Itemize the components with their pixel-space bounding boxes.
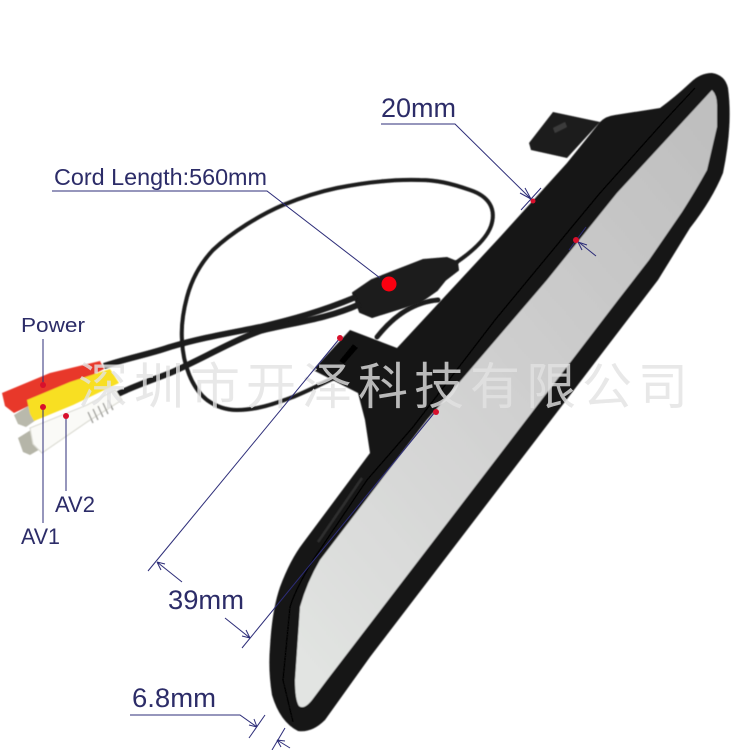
- label: AV2: AV2: [55, 492, 95, 517]
- white plug: [30, 390, 122, 453]
- mirror glass: [295, 90, 717, 707]
- mirror: [269, 73, 730, 731]
- label: 6.8mm: 6.8mm: [132, 683, 216, 713]
- frame highlight: [318, 478, 362, 542]
- label: 20mm: 20mm: [381, 93, 456, 123]
- bracket slot: [339, 344, 358, 364]
- metal tip: white plug: [18, 428, 42, 455]
- white plug ribs: [88, 400, 113, 423]
- RCA connectors: [2, 361, 122, 455]
- rear bracket top: [529, 112, 600, 158]
- label: AV1: AV1: [21, 524, 60, 549]
- dimension lines: [43, 124, 596, 750]
- red markers: [40, 198, 579, 419]
- RCA cables: [104, 297, 360, 394]
- frame groove: [283, 88, 695, 722]
- mirror body: [269, 73, 730, 731]
- inline module: [353, 258, 458, 317]
- yellow plug: [27, 369, 119, 421]
- cable loop: [182, 180, 493, 410]
- watermark: 深圳市开泽科技有限公司: [78, 359, 688, 415]
- red plug: [2, 361, 104, 413]
- label: 39mm: 39mm: [168, 585, 244, 615]
- metal tip: yellow plug: [14, 405, 36, 427]
- label: cord length: Cord Length:560mm: [54, 164, 267, 190]
- label: power: Power: [21, 314, 85, 337]
